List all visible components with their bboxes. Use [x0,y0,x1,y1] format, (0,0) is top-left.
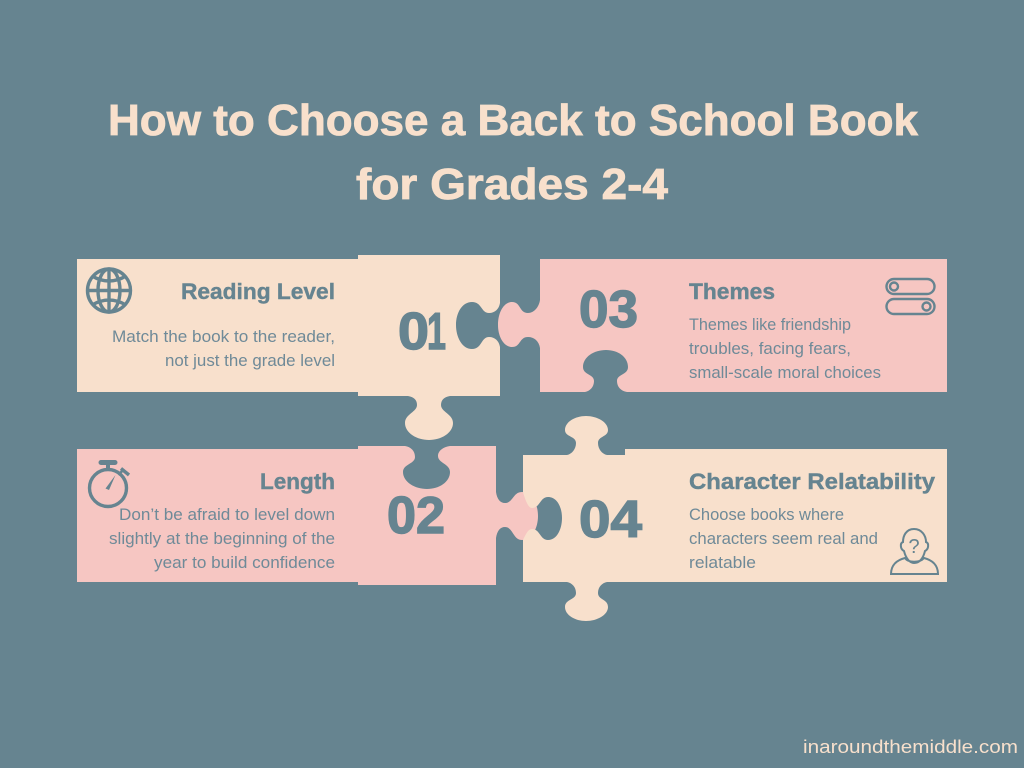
icon: person with question mark: ? [908,536,920,558]
description: Don’t be afraid to level down [119,505,335,524]
description: slightly at the beginning of the [109,529,335,548]
description [112,327,335,370]
footer url: inaroundthemiddle.com [803,737,1018,757]
title [108,96,919,209]
description: Themes like friendship [689,315,851,334]
icon: stopwatch [90,462,129,506]
panel: 03 themes [498,259,947,392]
panel: 01 reading level [77,255,500,440]
description: relatable [689,553,756,572]
number 01 [398,303,446,361]
icon: globe [88,269,130,312]
description: Match the book to the reader, [112,327,335,346]
heading: Themes [689,279,775,304]
description: year to build confidence [154,553,335,572]
icon: person with question mark [891,529,938,574]
description: troubles, facing fears, [689,339,851,358]
number 01: 0 [398,303,429,361]
icon: toggles [886,279,934,314]
heading: Character Relatability [689,469,936,494]
description: characters seem real and [689,529,878,548]
description [689,315,881,382]
number 03: 03 [579,281,638,339]
description: Choose books where [689,505,844,524]
heading: Length [260,469,335,494]
puzzle piece 04 [523,416,947,621]
puzzle piece 01 [77,255,500,440]
number 04: 04 [579,491,642,549]
title: for Grades 2-4 [356,160,669,209]
number 01: 1 [427,303,446,361]
heading: Reading Level [181,279,335,304]
title: How to Choose a Back to School Book [108,96,919,145]
number 02: 02 [387,487,445,545]
puzzle piece 02 [77,446,538,585]
description: small-scale moral choices [689,363,881,382]
puzzle piece 03 [498,259,947,392]
description: not just the grade level [165,351,335,370]
description [109,505,335,572]
panel: 04 character relatability [523,416,947,621]
description [689,505,878,572]
panel: 02 length [77,446,538,585]
